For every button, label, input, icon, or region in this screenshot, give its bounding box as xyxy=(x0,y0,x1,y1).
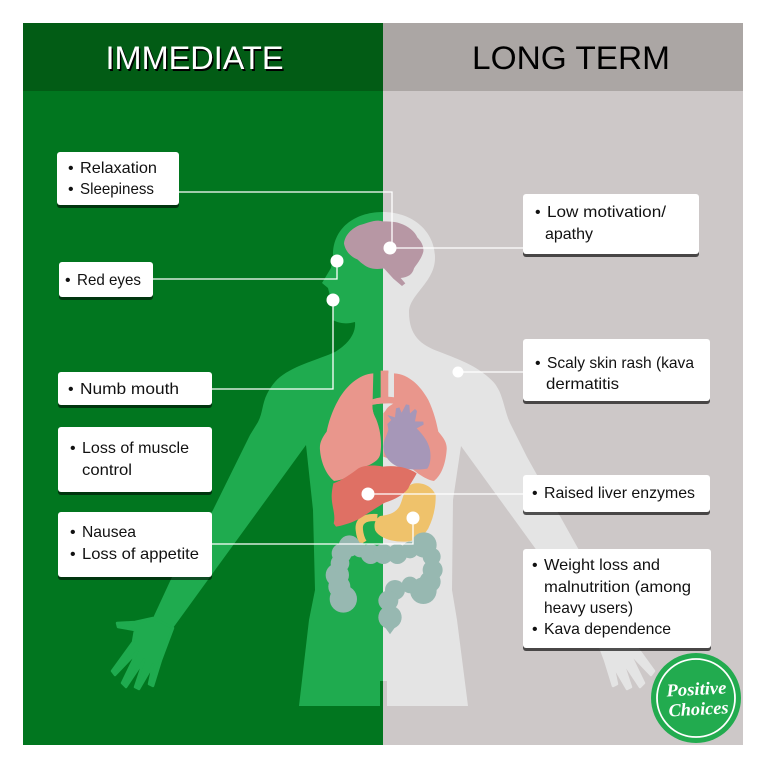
logo: positive choices: Choices xyxy=(668,697,729,720)
connector: numb mouth xyxy=(212,300,333,389)
callout: relaxation, sleepiness: • xyxy=(68,160,74,177)
callout: scaly skin rash: Scaly skin rash (kava xyxy=(547,355,694,372)
marker dots xyxy=(326,242,464,524)
body silhouette: left half xyxy=(112,212,383,706)
callout: red eyes: • xyxy=(65,272,71,289)
callout: loss of muscle control: control xyxy=(82,462,132,479)
callout: raised liver enzymes: Raised liver enzymes xyxy=(544,485,695,502)
callout: relaxation, sleepiness: • xyxy=(68,181,74,198)
callout: weight loss, dependence: malnutrition (among xyxy=(544,579,691,596)
callout: low motivation: • xyxy=(535,204,541,221)
callout: weight loss, dependence xyxy=(523,549,711,651)
connector: brain xyxy=(179,192,523,248)
callout: low motivation xyxy=(523,194,699,257)
callout: low motivation: Low motivation/ xyxy=(547,204,667,221)
panel: immediate background xyxy=(23,23,383,745)
callout: weight loss, dependence: heavy users) xyxy=(544,600,633,617)
organ: heart xyxy=(383,404,431,470)
airway gaps xyxy=(373,371,393,440)
callout: numb mouth xyxy=(58,372,212,408)
connector: red eyes xyxy=(153,261,337,279)
callout: relaxation, sleepiness: Relaxation xyxy=(80,160,157,177)
callout: weight loss, dependence: • xyxy=(532,621,538,638)
callout: raised liver enzymes xyxy=(523,475,710,515)
heading: long term: LONG TERM xyxy=(472,40,670,76)
heading: immediate: IMMEDIATE xyxy=(107,42,285,78)
body silhouette: right half xyxy=(383,212,654,706)
connector: skin xyxy=(458,371,523,373)
callout: loss of muscle control: • xyxy=(70,440,76,457)
callout: weight loss, dependence: Kava dependence xyxy=(544,621,671,638)
right hand thickening xyxy=(593,618,654,689)
callout: relaxation, sleepiness: Sleepiness xyxy=(80,181,154,198)
callout: relaxation, sleepiness xyxy=(57,152,179,208)
callout: nausea, loss of appetite: Nausea xyxy=(82,524,136,541)
organ: brain xyxy=(344,221,423,286)
callout: loss of muscle control: Loss of muscle xyxy=(82,440,189,457)
callout: scaly skin rash xyxy=(523,339,710,404)
callout: weight loss, dependence: Weight loss and xyxy=(544,557,660,574)
organ: intestines xyxy=(326,532,443,634)
callout: weight loss, dependence: • xyxy=(532,557,538,574)
callout: scaly skin rash: • xyxy=(535,355,541,372)
callout: scaly skin rash: dermatitis xyxy=(546,376,619,393)
logo: positive choices xyxy=(651,653,741,743)
connector: stomach xyxy=(212,518,413,544)
heading: immediate: IMMEDIATE xyxy=(106,40,284,76)
callout: nausea, loss of appetite xyxy=(58,512,212,580)
left hand thickening xyxy=(112,618,173,689)
callout: nausea, loss of appetite: Loss of appetite xyxy=(82,546,199,563)
callout: red eyes xyxy=(59,262,153,300)
connector: liver xyxy=(368,493,523,495)
organ: stomach and duodenum xyxy=(359,483,436,543)
logo: positive choices: Positive xyxy=(665,677,727,701)
callout: nausea, loss of appetite: • xyxy=(70,524,76,541)
callout: numb mouth: • xyxy=(68,381,74,398)
callout: red eyes: Red eyes xyxy=(77,272,141,289)
organ: lungs and trachea xyxy=(320,371,447,481)
callout: low motivation: apathy xyxy=(545,226,593,243)
callout: raised liver enzymes: • xyxy=(532,485,538,502)
organ: liver xyxy=(332,466,417,527)
panel: long term background xyxy=(383,23,743,745)
callout: numb mouth: Numb mouth xyxy=(80,381,179,398)
callout: nausea, loss of appetite: • xyxy=(70,546,76,563)
callout: loss of muscle control xyxy=(58,427,212,495)
